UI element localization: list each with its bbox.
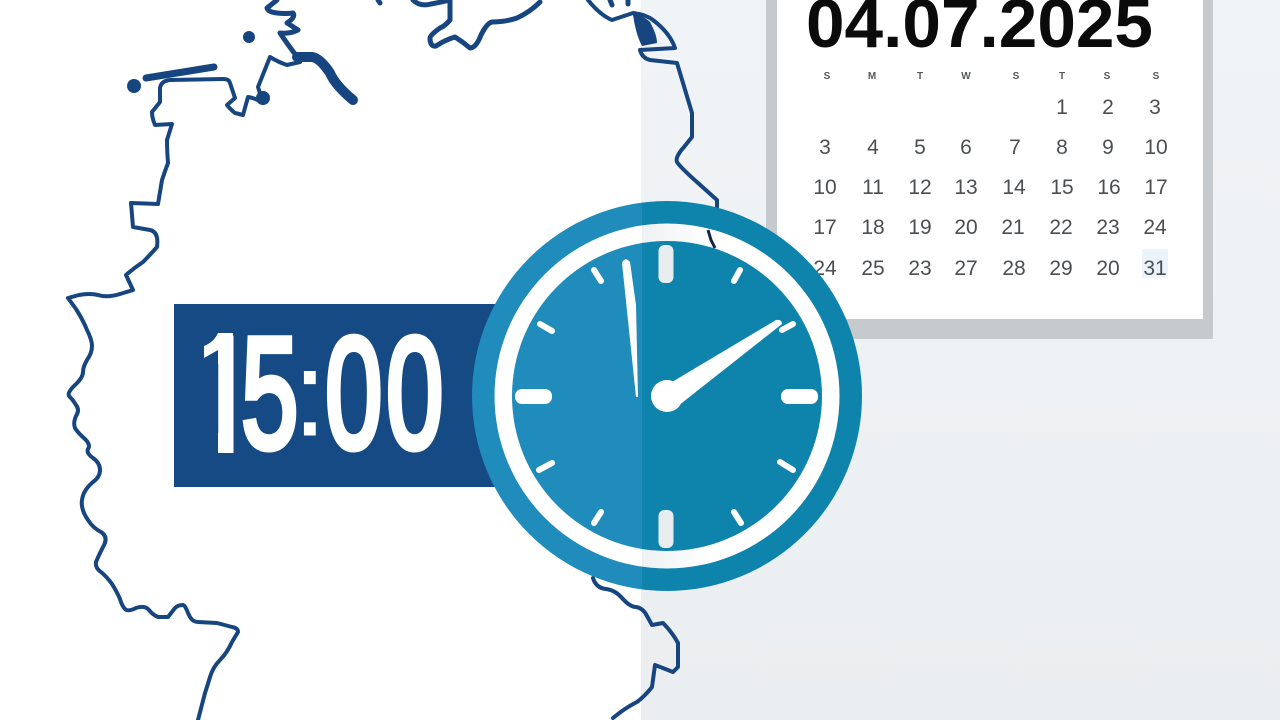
day numbers: 20	[1096, 257, 1120, 280]
day numbers: 7	[1009, 136, 1021, 159]
day numbers: 10	[813, 176, 837, 199]
island bar	[146, 67, 214, 78]
day numbers: 29	[1049, 257, 1073, 280]
north coast inlet	[297, 57, 353, 100]
weekday labels: M	[868, 71, 876, 82]
day numbers: 13	[954, 176, 978, 199]
clock hub	[651, 380, 683, 412]
day numbers: 14	[1002, 176, 1026, 199]
day numbers: 24	[1143, 216, 1167, 239]
day numbers: 11	[862, 176, 884, 199]
weekday labels: S	[1104, 71, 1111, 82]
weekday labels: S	[1013, 71, 1020, 82]
calendar page	[777, 0, 1203, 319]
day numbers: 27	[954, 257, 978, 280]
weekday labels	[824, 71, 1160, 82]
calendar shadow	[766, 0, 1213, 339]
day numbers: 8	[1056, 136, 1068, 159]
day numbers: 22	[1049, 216, 1073, 239]
day numbers: 3	[1149, 96, 1161, 119]
north-east coast and east border	[588, 0, 717, 207]
calendar	[766, 0, 1213, 339]
clock white ring	[494, 224, 840, 568]
day numbers: 4	[867, 136, 879, 159]
day numbers: 6	[960, 136, 972, 159]
time label: 0	[386, 305, 443, 482]
time label: :	[294, 326, 326, 461]
day numbers	[813, 96, 1168, 280]
day numbers: 9	[1102, 136, 1114, 159]
south-east border	[593, 578, 678, 718]
day numbers: 1	[1056, 96, 1068, 119]
day numbers: 17	[1144, 176, 1168, 199]
day numbers: 12	[908, 176, 932, 199]
day numbers: 2	[1102, 96, 1114, 119]
day numbers: 19	[908, 216, 932, 239]
day numbers: 23	[1096, 216, 1120, 239]
clock outer ring	[472, 201, 862, 591]
day numbers: 15	[1050, 176, 1074, 199]
weekday labels: T	[1059, 71, 1065, 82]
minute hand	[622, 259, 638, 397]
weekday labels: W	[961, 71, 971, 82]
day numbers: 25	[861, 257, 885, 280]
weekday labels: S	[1153, 71, 1160, 82]
day numbers: 18	[861, 216, 885, 239]
weekday labels: S	[824, 71, 831, 82]
time label: 0	[325, 305, 382, 482]
day numbers: 28	[1002, 257, 1026, 280]
day numbers: 5	[914, 136, 926, 159]
time label	[204, 333, 442, 453]
minor ticks	[539, 270, 793, 523]
map details: islands and lagoon	[127, 15, 657, 105]
day numbers: 23	[908, 257, 932, 280]
day numbers: 10	[1144, 136, 1168, 159]
hour hand	[672, 320, 782, 406]
day numbers: 24	[813, 257, 837, 280]
day numbers: 16	[1097, 176, 1121, 199]
day numbers: 21	[1001, 216, 1025, 239]
west and south border	[68, 57, 300, 720]
day numbers: 20	[954, 216, 978, 239]
border line visible on ring	[708, 230, 715, 248]
day numbers: 31	[1143, 257, 1167, 280]
clock face	[512, 241, 822, 551]
north coast middle	[378, 0, 540, 48]
time box	[174, 304, 504, 487]
day numbers: 17	[813, 216, 837, 239]
clock	[472, 201, 862, 591]
time label: 5	[241, 305, 298, 482]
day numbers: 3	[819, 136, 831, 159]
map outline of Germany	[68, 0, 717, 720]
hour ticks	[515, 245, 818, 548]
time label: 1	[196, 307, 253, 484]
highlighted day	[1142, 249, 1168, 278]
weekday labels: T	[917, 71, 923, 82]
